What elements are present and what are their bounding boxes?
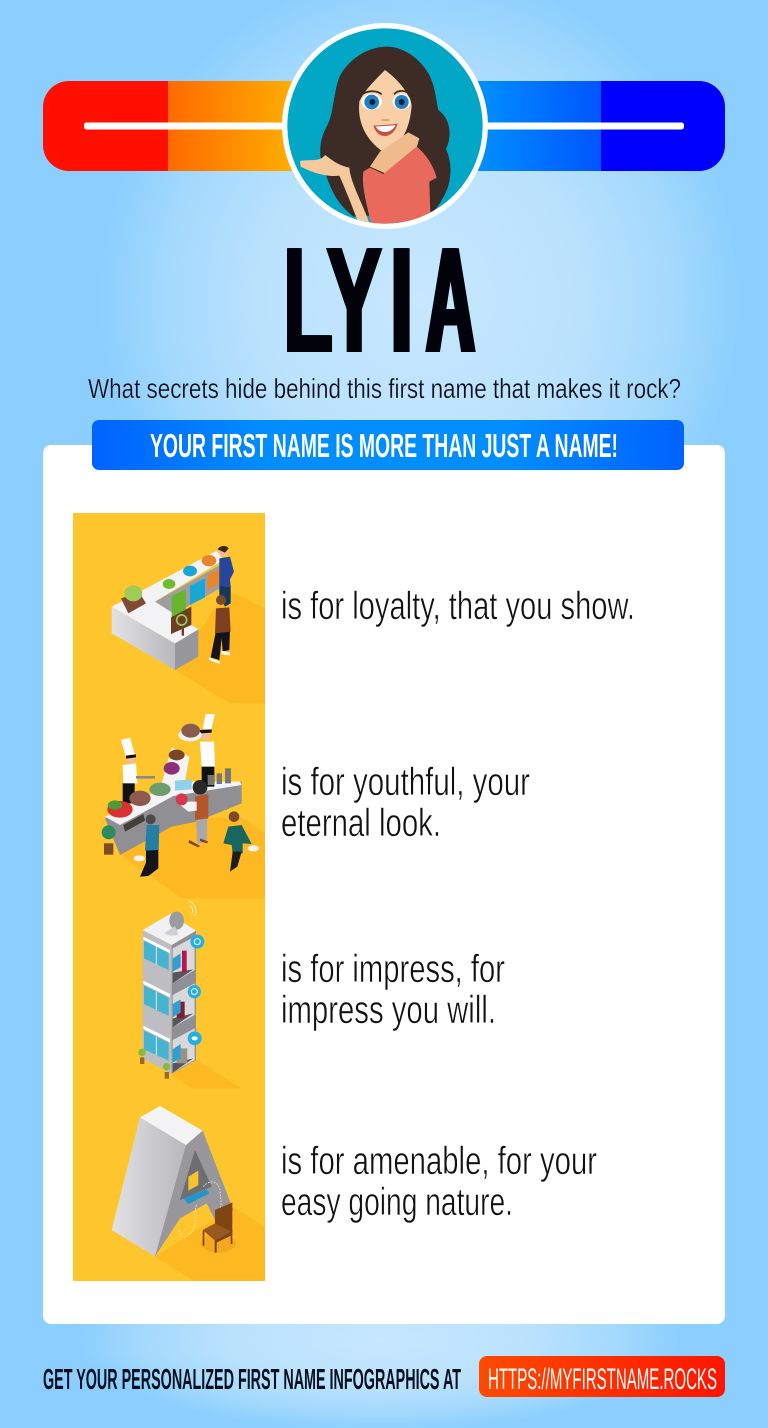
windows: [144, 940, 169, 970]
letter text: I: [281, 948, 505, 1032]
yellow illustration column: [73, 513, 265, 1281]
letter text: A: [281, 1140, 597, 1224]
chef left: [121, 738, 155, 803]
title: Y: [326, 215, 382, 384]
title: L: [283, 215, 333, 384]
footer url button: [479, 1356, 725, 1397]
smile: [373, 124, 398, 136]
wifi badges: [190, 935, 204, 949]
letter text: Y: is for youthful, your: [281, 761, 530, 804]
illustration: giant letter A for A: [112, 1106, 265, 1281]
letter text: Y: eternal look.: [281, 802, 441, 845]
guest in teal: [140, 814, 159, 877]
letter text: A: easy going nature.: [281, 1181, 513, 1224]
food: [169, 750, 185, 760]
chair: [203, 1202, 232, 1253]
eyes: [361, 94, 382, 110]
avatar portrait: [282, 23, 488, 229]
title: I: [389, 215, 415, 384]
arm and hand: [300, 155, 370, 225]
person in brown: [209, 595, 231, 664]
white content panel: [43, 445, 725, 1324]
banner: [92, 420, 684, 470]
illustration: office tower for I: [138, 901, 242, 1088]
illustration: buffet for Y: [102, 714, 265, 898]
title: [283, 215, 476, 384]
top: [363, 147, 437, 225]
letter text: I: is for impress, for: [281, 948, 505, 991]
white bar line: [84, 122, 684, 130]
chef right: [178, 714, 215, 787]
neck: [370, 132, 419, 173]
guest in orange: [176, 780, 208, 847]
letter text: A: is for amenable, for your: [281, 1140, 597, 1183]
guest in green: [223, 811, 259, 872]
person in blue: [218, 546, 234, 607]
plant: [102, 825, 116, 855]
title: A: [426, 215, 475, 384]
balconies: [173, 937, 195, 983]
letter text: Y: [281, 761, 530, 845]
satellite dish: [164, 901, 196, 936]
hair: [320, 47, 451, 217]
letter text: L: is for loyalty, that you show.: [281, 585, 635, 628]
illustration: recycling counter for L: [112, 546, 265, 703]
letter text: I: impress you will.: [281, 989, 496, 1032]
plants: [138, 1049, 170, 1079]
header colour bar: [43, 81, 725, 171]
